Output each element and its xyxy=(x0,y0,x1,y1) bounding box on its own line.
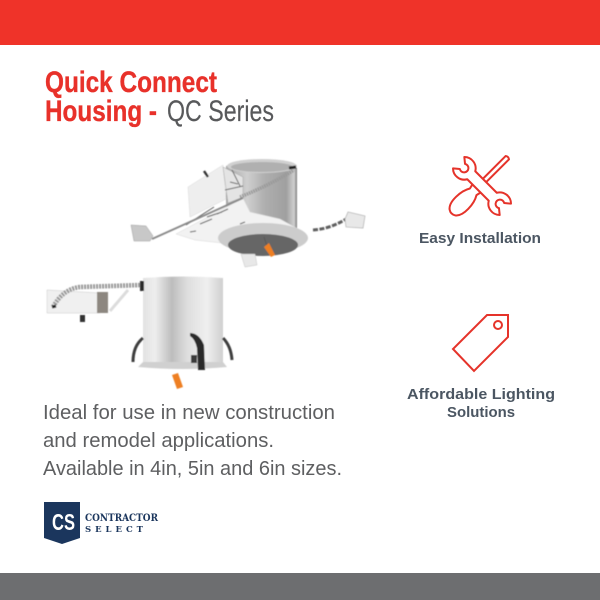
title xyxy=(45,66,274,128)
description text: and remodel applications. xyxy=(43,430,274,452)
right bracket xyxy=(345,212,365,228)
title: QC Series xyxy=(167,95,274,128)
description text xyxy=(43,402,342,480)
orange connector xyxy=(172,373,183,389)
logo: contractor select: SELECT xyxy=(85,525,144,535)
label: affordable lighting solutions: Solutions xyxy=(447,404,515,421)
ring and opening xyxy=(218,223,308,253)
left bar xyxy=(152,198,243,239)
top red band xyxy=(0,0,600,45)
center clip xyxy=(190,333,205,370)
conduit clamp xyxy=(140,281,144,291)
logo monogram: CS xyxy=(52,509,75,535)
flange xyxy=(138,362,227,369)
screwdriver handle xyxy=(445,180,485,220)
right bar xyxy=(313,219,346,230)
description text: Ideal for use in new construction xyxy=(43,402,335,424)
conduit xyxy=(240,170,294,197)
description text: Available in 4in, 5in and 6in sizes. xyxy=(43,458,342,480)
bottom gray band xyxy=(0,573,600,600)
clamp under box xyxy=(80,315,85,322)
icon: wrench and screwdriver xyxy=(445,155,513,220)
product photo: remodel housing xyxy=(47,276,232,389)
junction box xyxy=(47,290,100,313)
screw on box xyxy=(204,171,208,177)
mounting plate xyxy=(176,198,308,248)
screwdriver shaft xyxy=(476,155,510,189)
product photo: housing with mounting bars xyxy=(131,159,365,267)
icon: price tag xyxy=(453,315,508,371)
box module xyxy=(97,292,108,313)
logo shield xyxy=(44,502,80,544)
conduit xyxy=(53,285,142,307)
title: Quick Connect xyxy=(45,66,217,99)
bracket parts xyxy=(223,167,243,203)
can body xyxy=(143,276,223,365)
label: affordable lighting solutions xyxy=(407,386,555,421)
left clip xyxy=(133,338,143,362)
junction box xyxy=(188,165,226,217)
can body xyxy=(226,159,297,228)
label: affordable lighting solutions: Affordable Lighting xyxy=(407,386,555,403)
wire and orange connector xyxy=(264,237,267,246)
logo: contractor select xyxy=(44,502,159,544)
wrench xyxy=(451,155,513,217)
lower tab xyxy=(241,254,257,267)
title: Housing - xyxy=(45,95,157,128)
brace xyxy=(110,290,128,311)
plate marks xyxy=(186,207,245,236)
logo wordmark: CONTRACTOR xyxy=(85,513,159,524)
right clip xyxy=(223,338,232,360)
label: easy installation: Easy Installation xyxy=(419,230,541,247)
conduit clamp xyxy=(289,167,296,168)
left bracket xyxy=(131,225,153,241)
